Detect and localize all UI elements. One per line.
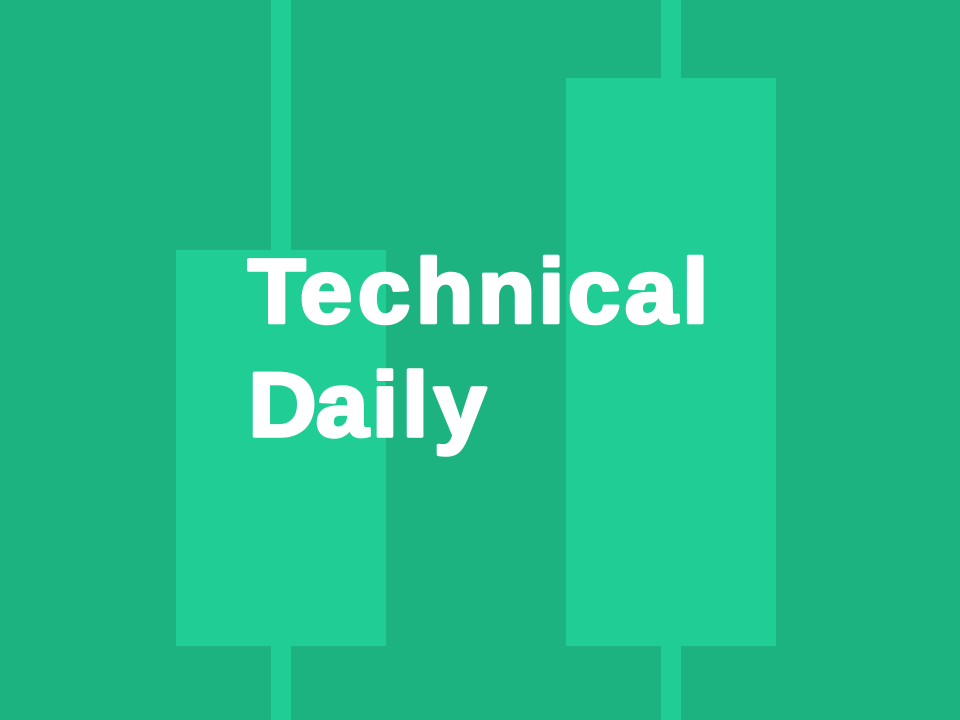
candlestick: left: [176, 0, 386, 720]
candlestick: right: [566, 0, 776, 720]
title: [248, 240, 708, 456]
title: Daily: [248, 354, 487, 456]
title: Technical: [248, 240, 708, 342]
